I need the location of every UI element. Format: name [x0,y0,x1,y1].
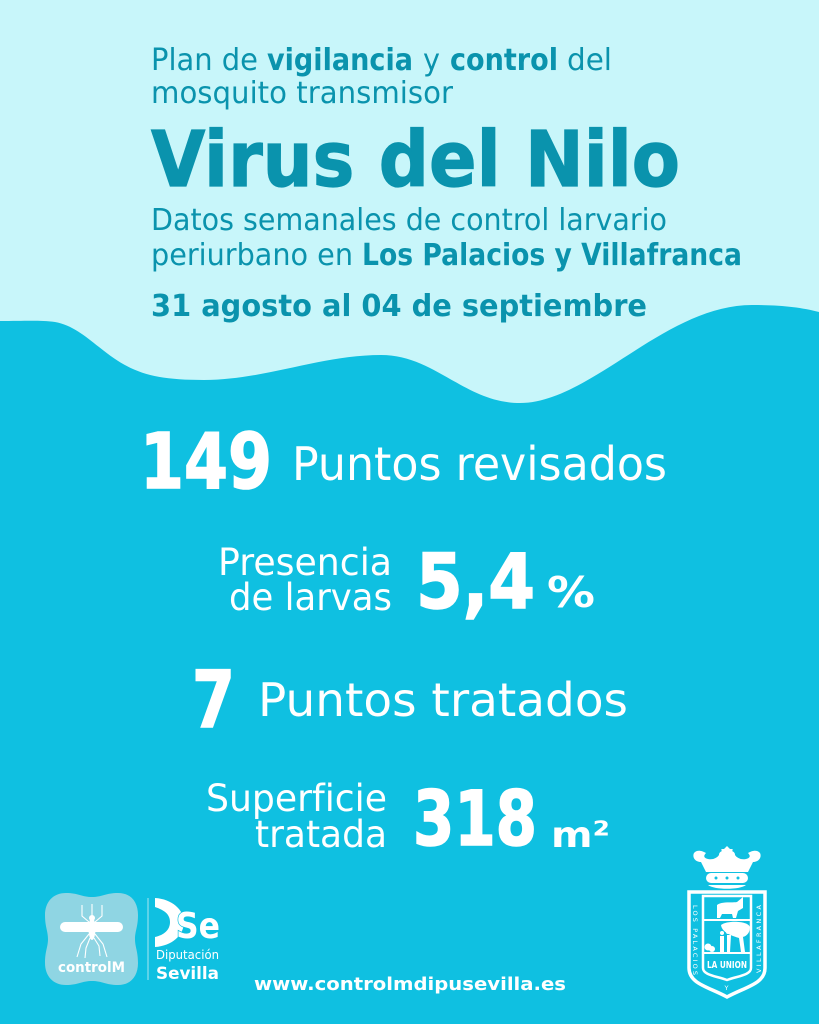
logo: Diputación de Sevilla: Diputación [156,948,219,962]
crest: Los Palacios y Villafranca: VILLAFRANCA [755,904,763,973]
heading: plan de vigilancia [151,43,612,111]
stat: puntos revisados [140,418,667,507]
crest: Los Palacios y Villafranca: LA UNION [707,960,747,971]
logo: Diputación de Sevilla: Se [176,906,220,947]
stat: superficie tratada: 318 [413,774,537,863]
subtitle [151,203,742,273]
heading: plan de vigilancia: control [450,43,558,78]
inner panel [703,896,751,980]
stat: presencia de larvas: Presencia [218,541,392,584]
stat: superficie tratada: tratada [255,813,387,856]
bull [717,897,743,918]
stat: puntos revisados: 149 [140,418,272,507]
heading: plan de vigilancia: mosquito transmisor [151,76,454,111]
stat: superficie tratada: Superficie [206,777,387,820]
heading: plan de vigilancia: del [567,43,612,78]
shield outline [689,892,765,997]
title: Virus del Nilo [151,116,680,205]
website url: www.controlmdipusevilla.es [254,974,566,995]
stat: superficie tratada [206,774,610,863]
crest: Los Palacios y Villafranca: LOS PALACIOS [691,905,699,975]
heading: plan de vigilancia: Plan de [151,43,258,78]
stat: presencia de larvas [218,537,595,626]
heading: plan de vigilancia: vigilancia [267,43,413,78]
crest: Los Palacios y Villafranca: Y [724,984,728,992]
crown [693,846,761,889]
subtitle: periurbano en [151,238,353,273]
tree and figures [721,922,750,952]
stat: puntos tratados: 7 [192,656,235,746]
logo: Diputación de Sevilla: Sevilla [156,964,219,984]
logo: controlM: controlM [58,960,125,976]
subtitle: Datos semanales de control larvario [151,203,667,238]
stat: presencia de larvas: % [547,568,595,617]
stat: puntos tratados: Puntos tratados [258,673,628,727]
crest: Los Palacios y Villafranca [689,846,765,997]
subtitle: Los Palacios y Villafranca [362,238,742,273]
stat: presencia de larvas: 5,4 [416,537,535,626]
logo: Diputación de Sevilla [148,898,220,984]
wave background [0,305,819,1024]
date range: 31 agosto al 04 de septiembre [151,289,647,324]
heading: plan de vigilancia: y [423,43,440,78]
stat: puntos tratados [192,656,628,746]
stat: puntos revisados: Puntos revisados [292,437,667,491]
stat: presencia de larvas: de larvas [229,576,392,619]
stat: superficie tratada: m² [551,815,610,856]
logo: controlM [45,893,138,985]
